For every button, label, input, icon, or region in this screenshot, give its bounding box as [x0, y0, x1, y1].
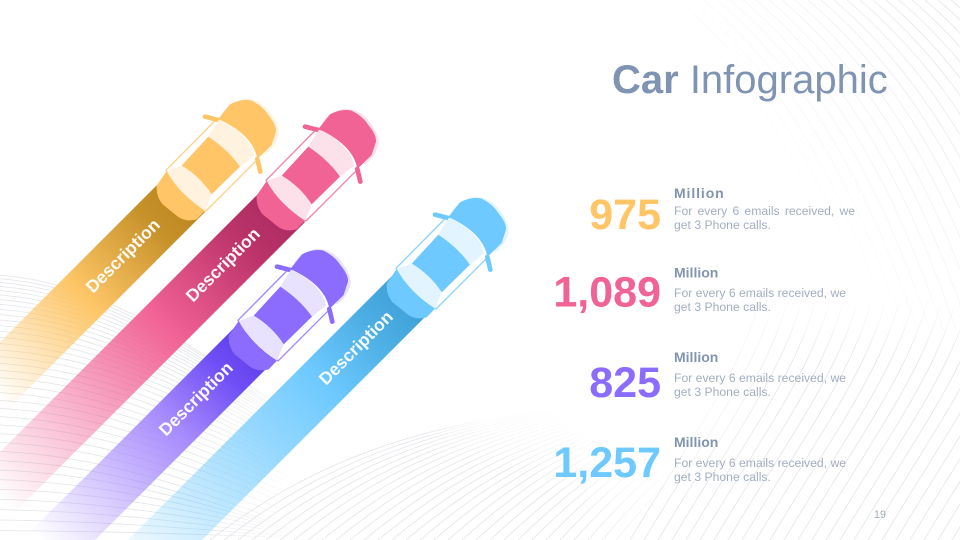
car: blue [387, 197, 509, 318]
stat: 975: get 3 Phone calls. [674, 218, 771, 232]
road: yellow [0, 177, 205, 417]
road label: yellow: Description [82, 215, 164, 297]
stat: 975 [589, 185, 855, 239]
stat: 1,257: Million [674, 434, 718, 450]
stat: 1,257: 1,257 [553, 439, 661, 487]
car: purple [229, 249, 351, 370]
stat: 825: Million [674, 349, 718, 365]
stat: 825: For every 6 emails received, we [674, 371, 846, 385]
road: pink [0, 187, 305, 527]
stat: 1,089 [553, 264, 846, 316]
page number: 19 [874, 509, 886, 521]
stat: 825: 825 [589, 359, 661, 407]
road label: pink: Description [182, 224, 264, 306]
road: purple [22, 325, 277, 540]
stat: 1,089: Million [674, 264, 718, 280]
stat: 1,257: get 3 Phone calls. [674, 470, 771, 484]
stat: 1,089: For every 6 emails received, we [674, 286, 846, 300]
stat: 825: get 3 Phone calls. [674, 385, 771, 399]
road label: blue: Description [315, 307, 397, 389]
stat: 1,257 [553, 434, 846, 487]
stat: 1,089: get 3 Phone calls. [674, 300, 771, 314]
stat: 975: Million [674, 185, 725, 201]
stat: 975: 975 [589, 191, 661, 239]
stat: 1,257: For every 6 emails received, we [674, 456, 846, 470]
stat: 1,089: 1,089 [553, 268, 661, 316]
title: Car Infographic [612, 58, 888, 102]
stat: 825 [589, 349, 846, 407]
road label: purple: Description [155, 358, 237, 440]
road: blue [128, 273, 435, 540]
car: yellow [157, 99, 279, 220]
stat: 975: For every 6 emails received, we [674, 204, 855, 218]
car: pink [257, 109, 379, 230]
